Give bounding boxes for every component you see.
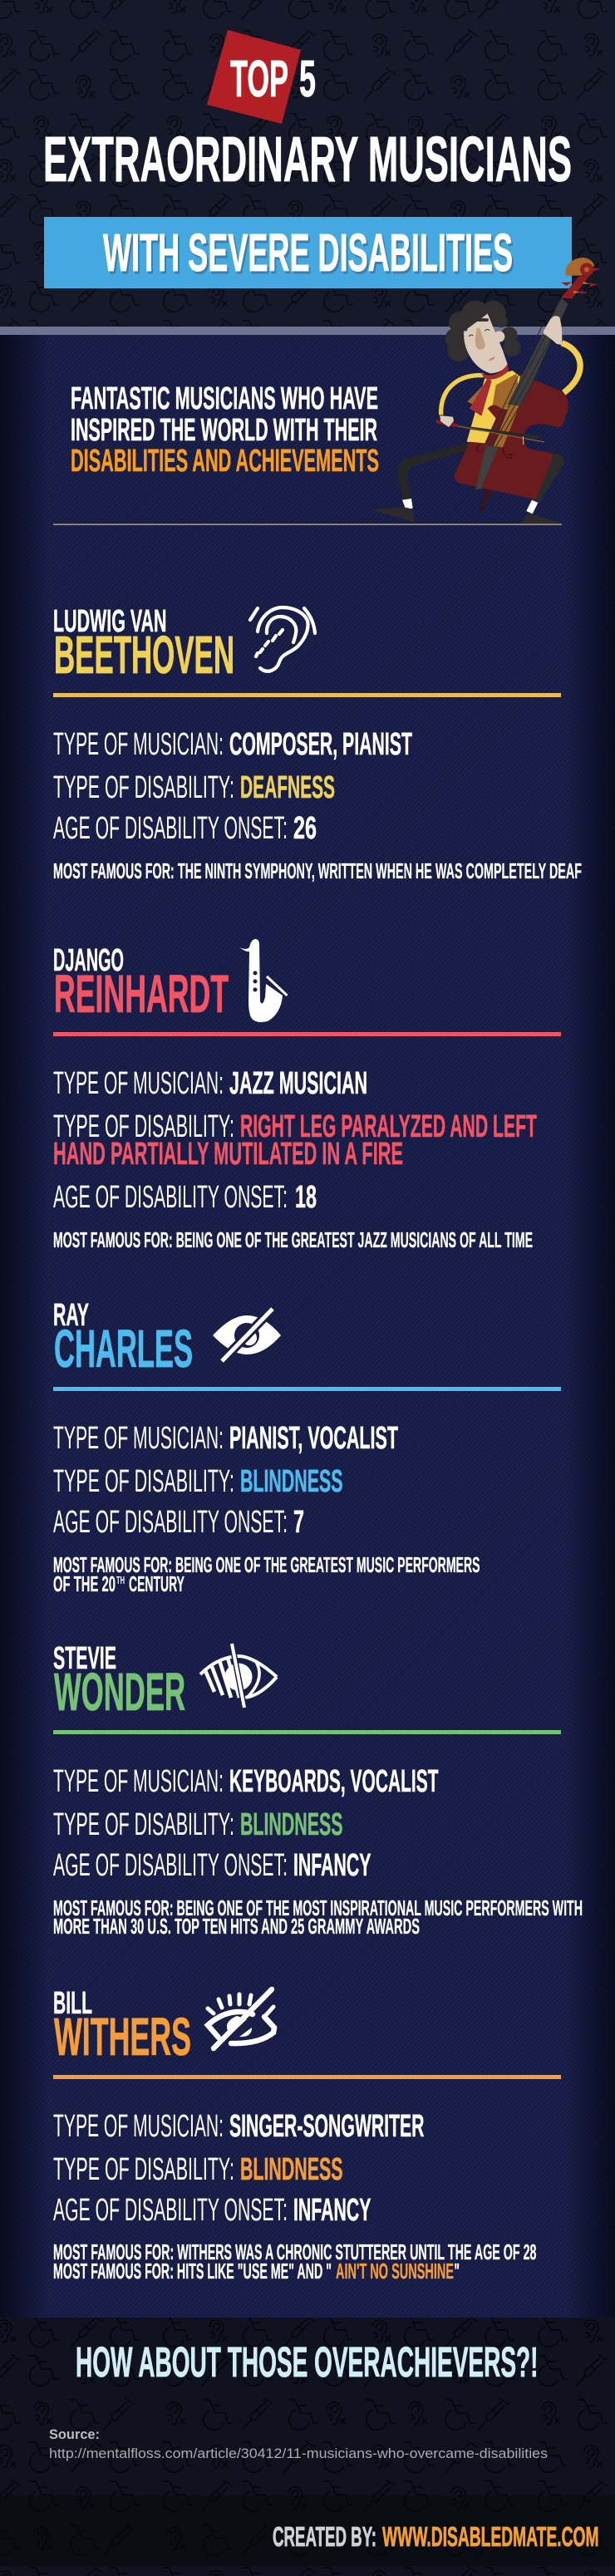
title: top 5: TOP: [230, 50, 288, 108]
left arm: [441, 376, 484, 415]
age of onset: AGE OF DISABILITY ONSET:: [53, 811, 288, 846]
bow: [435, 420, 544, 445]
most famous for: CENTURY: [129, 1571, 184, 1596]
divider: [53, 1032, 561, 1036]
age of onset: [53, 1180, 317, 1215]
divider: [53, 1730, 561, 1734]
panel: header background with pattern: [0, 0, 615, 327]
illustration: cellist: [371, 258, 601, 524]
name: CHARLES: [54, 1319, 193, 1379]
age of onset: [53, 811, 317, 846]
most famous for: [53, 2239, 537, 2283]
icon: eye with lashes and slash: [208, 1989, 274, 2048]
name: BEETHOVEN: [54, 625, 234, 685]
age of onset: AGE OF DISABILITY ONSET:: [53, 1848, 288, 1883]
jacket lapels: [467, 373, 521, 410]
age of onset: AGE OF DISABILITY ONSET:: [53, 1180, 288, 1215]
intro text: DISABILITIES AND ACHIEVEMENTS: [71, 444, 379, 479]
header divider band: [0, 327, 615, 335]
age of onset: [53, 1505, 304, 1540]
type of disability: TYPE OF DISABILITY:: [53, 1464, 234, 1499]
strings: [485, 324, 559, 446]
intro text: INSPIRED THE WORLD WITH THEIR: [71, 413, 377, 448]
name: WITHERS: [54, 2007, 191, 2067]
most famous for: [53, 1552, 480, 1596]
type of disability: [53, 1109, 537, 1172]
name: [53, 1986, 191, 2067]
section: Bill Withers: [53, 1986, 561, 2283]
right leg: [532, 453, 564, 503]
type of disability: TYPE OF DISABILITY:: [53, 770, 234, 805]
blue banner: [44, 217, 572, 288]
type of musician: TYPE OF MUSICIAN:: [53, 2109, 224, 2144]
age of onset: 18: [295, 1180, 317, 1215]
type of musician: PIANIST, VOCALIST: [229, 1421, 398, 1456]
type of musician: SINGER-SONGWRITER: [229, 2109, 424, 2144]
fingerboard: [508, 297, 568, 406]
type of disability: TYPE OF DISABILITY:: [53, 1109, 234, 1144]
section: Stevie Wonder: [53, 1641, 583, 1939]
type of musician: JAZZ MUSICIAN: [229, 1066, 367, 1101]
icon: crossed eye: [213, 1309, 281, 1361]
top hand: [544, 316, 562, 345]
most famous for: [53, 1895, 583, 1939]
age of onset: AGE OF DISABILITY ONSET:: [53, 1505, 288, 1540]
title: top 5: 5: [299, 50, 316, 108]
scarf: [470, 364, 509, 416]
credit line: [273, 2522, 598, 2553]
icon: eye with slash: [200, 1644, 277, 1708]
type of disability: BLINDNESS: [240, 2152, 342, 2187]
type of musician: COMPOSER, PIANIST: [229, 727, 412, 762]
cello inlay: [494, 405, 519, 447]
type of musician: KEYBOARDS, VOCALIST: [229, 1764, 439, 1799]
type of musician: TYPE OF MUSICIAN:: [53, 1066, 224, 1101]
credit line: CREATED BY:: [273, 2522, 376, 2553]
left leg: [397, 443, 470, 500]
f holes: [477, 445, 512, 459]
source: [49, 2427, 548, 2461]
right arm: [562, 343, 580, 393]
icon: saxophone: [239, 939, 288, 1022]
most famous for: AIN'T NO SUNSHINE: [336, 2259, 454, 2283]
most famous for: ": [454, 2259, 460, 2283]
name: [53, 1641, 185, 1722]
endpin: [477, 490, 496, 521]
name: [53, 1298, 193, 1379]
scroll: [561, 258, 601, 298]
type of musician: TYPE OF MUSICIAN:: [53, 727, 224, 762]
name: DJANGO: [53, 943, 124, 978]
intro text: [71, 381, 379, 479]
most famous for: TH: [116, 1574, 125, 1586]
red tilted square: [207, 30, 301, 124]
panel: footer background with pattern: [0, 2318, 615, 2576]
age of onset: 26: [293, 811, 317, 846]
hair back: [445, 301, 521, 361]
type of disability: BLINDNESS: [240, 1807, 342, 1842]
name: LUDWIG VAN: [53, 604, 166, 639]
most famous for: OF THE 20: [53, 1571, 116, 1596]
intro text: FANTASTIC MUSICIANS WHO HAVE: [71, 381, 378, 416]
age of onset: 7: [293, 1505, 304, 1540]
type of disability: DEAFNESS: [240, 770, 335, 805]
name: BILL: [53, 1986, 92, 2021]
panel: main background: [0, 335, 615, 2318]
name: RAY: [53, 1298, 89, 1333]
bow hand: [440, 415, 454, 427]
divider: [53, 693, 561, 697]
age of onset: INFANCY: [293, 1848, 371, 1883]
most famous for: MOST FAMOUS FOR: HITS LIKE "USE ME" AND ": [53, 2259, 332, 2283]
age of onset: INFANCY: [293, 2193, 371, 2228]
type of disability: BLINDNESS: [240, 1464, 342, 1499]
name: WONDER: [54, 1662, 185, 1722]
torso: [467, 371, 521, 446]
source: Source:: [49, 2427, 100, 2442]
tailpiece: [475, 445, 498, 489]
divider: [53, 1387, 561, 1391]
name: [53, 604, 234, 685]
section: Ray Charles: [53, 1298, 561, 1596]
intro underline: [53, 524, 562, 525]
type of disability: TYPE OF DISABILITY:: [53, 1807, 234, 1842]
face: [464, 313, 508, 373]
type of musician: TYPE OF MUSICIAN:: [53, 1421, 224, 1456]
name: STEVIE: [53, 1641, 116, 1676]
section: Django Reinhardt: [53, 939, 561, 1252]
age of onset: AGE OF DISABILITY ONSET:: [53, 2193, 288, 2228]
type of disability: TYPE OF DISABILITY:: [53, 2152, 234, 2187]
name: REINHARDT: [54, 964, 229, 1024]
source: http://mentalfloss.com/article/30412/11-musicians-who-overcame-disabilities: [49, 2446, 548, 2461]
section: Ludwig van Beethoven: [53, 604, 582, 883]
icon: ear: [250, 607, 315, 671]
name: [53, 943, 229, 1024]
cello body: [455, 374, 568, 499]
divider: [53, 2075, 561, 2079]
type of musician: TYPE OF MUSICIAN:: [53, 1764, 224, 1799]
title block: [43, 30, 572, 288]
socks and shoes: [371, 499, 563, 524]
